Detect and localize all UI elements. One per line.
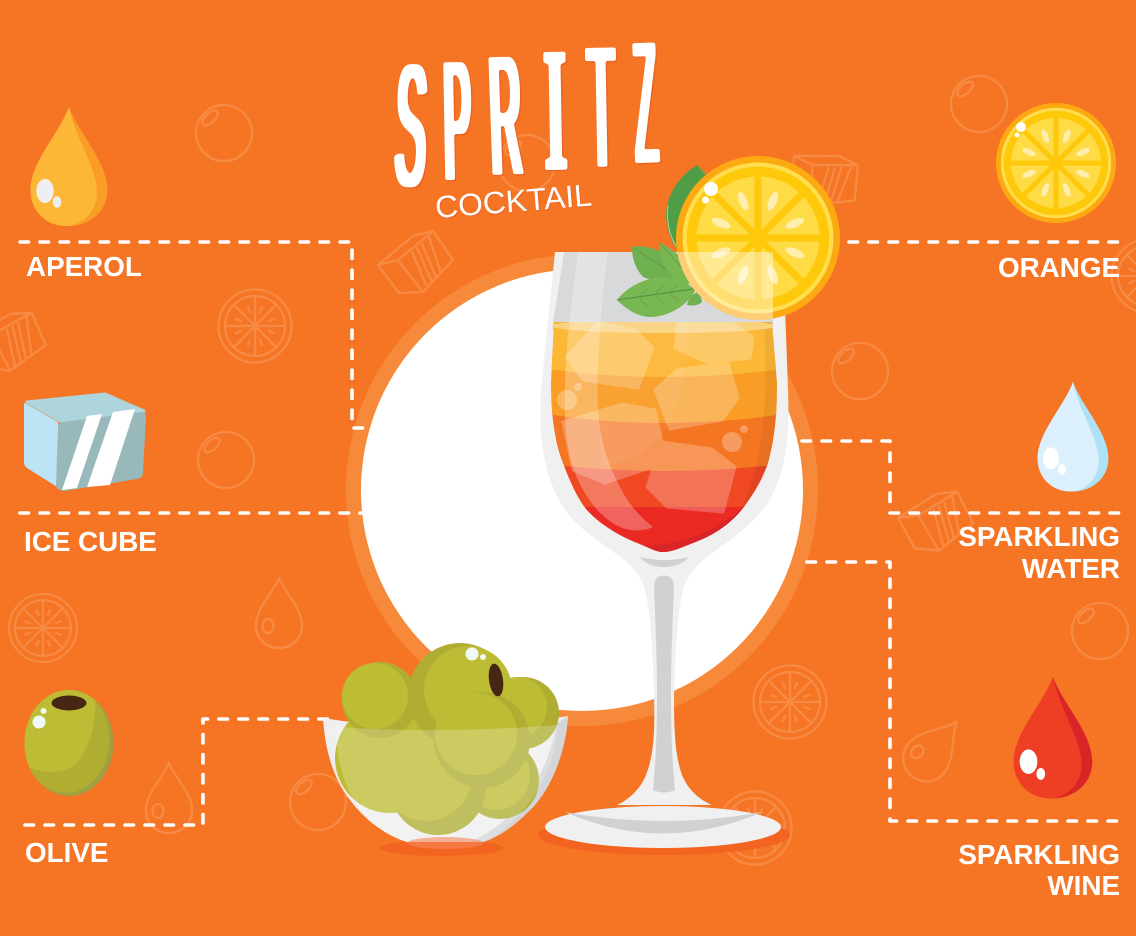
label: aperol: APEROL (26, 251, 142, 282)
ice cubes in drink (563, 322, 753, 512)
label: ice cube: ICE CUBE (24, 526, 157, 557)
empty upper glass (552, 252, 773, 330)
mint leaves (617, 165, 722, 317)
label: orange: ORANGE (998, 252, 1120, 283)
bubbles in drink (557, 383, 748, 452)
glass over slice (677, 252, 773, 320)
label: sparkling wine: WINE (1047, 870, 1120, 901)
olive pit (487, 663, 505, 697)
icon: orange slice (996, 103, 1116, 223)
bowl shadow (380, 840, 504, 856)
title: Spritz: T (586, 10, 617, 204)
icon: olive (24, 690, 114, 796)
front leaf (617, 277, 695, 317)
title: Spritz: R (487, 20, 524, 212)
small leaf (687, 292, 702, 306)
title: Spritz (393, 4, 660, 223)
middle leaf (660, 243, 700, 284)
foot shading (565, 812, 762, 834)
icon: aperol drop (30, 107, 108, 226)
glass highlight (565, 252, 653, 530)
bowl shading (470, 716, 568, 842)
left leaf (632, 246, 690, 283)
glass foot (545, 806, 781, 848)
white circle with ring (346, 254, 818, 726)
label: sparkling water: SPARKLING (958, 521, 1120, 552)
glass body and stem (540, 252, 788, 805)
bowl base arc (640, 557, 689, 567)
icon: water drop (1038, 382, 1108, 491)
title: Spritz: S (393, 28, 429, 223)
glass shadow (538, 815, 790, 855)
dashed connector lines (20, 242, 1120, 825)
bowl of olives (320, 643, 570, 849)
icon: ice cube (24, 394, 146, 491)
stem core (653, 576, 675, 792)
back leaf (666, 165, 722, 250)
liquid layers (551, 322, 777, 552)
title: Spritz: Z (631, 4, 660, 200)
wine glass (540, 252, 790, 848)
label: sparkling water: WATER (1022, 553, 1120, 584)
title: Spritz: I (543, 14, 567, 204)
bowl glass overlay (336, 725, 558, 842)
orange slice garnish (676, 156, 840, 320)
label: olive: OLIVE (25, 837, 108, 868)
icon: sparkling wine drop (1014, 677, 1092, 798)
bowl body (323, 716, 568, 842)
subtitle: cocktail: COCKTAIL (434, 177, 593, 225)
title: Spritz: P (442, 27, 472, 217)
olives (335, 643, 559, 835)
olive highlights (466, 648, 478, 660)
label: sparkling wine: SPARKLING (958, 839, 1120, 870)
